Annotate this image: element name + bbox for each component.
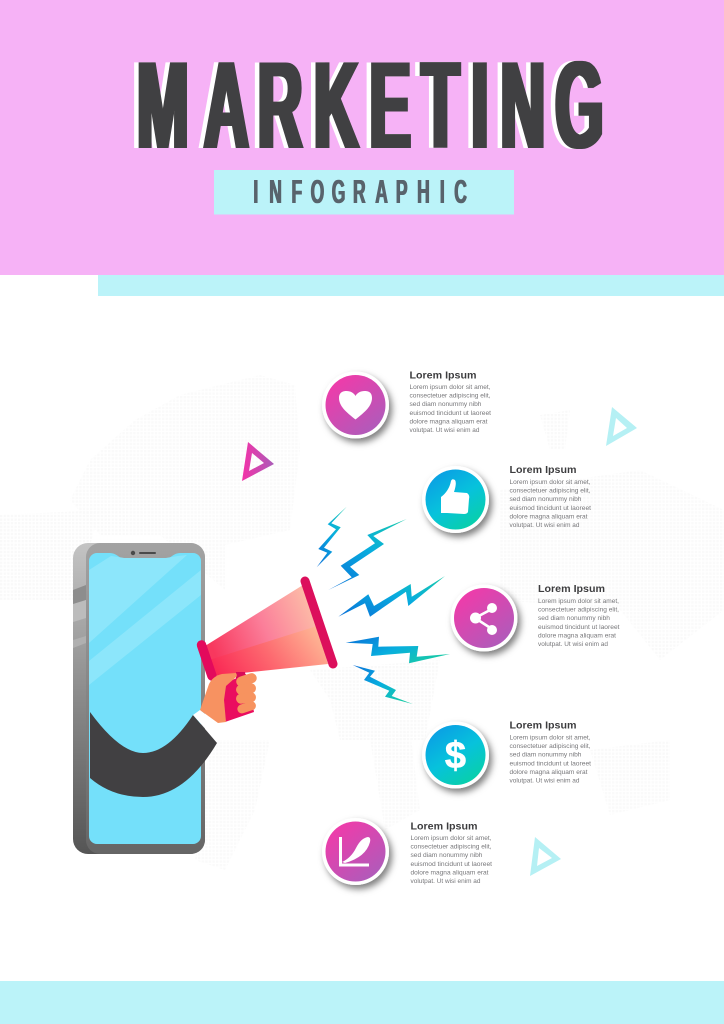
- phone: [73, 543, 205, 854]
- text block 1: [410, 370, 491, 434]
- text block 2: euismod tincidunt ut laoreet: [510, 505, 591, 512]
- text block 5: euismod tincidunt ut laoreet: [410, 861, 492, 868]
- text block 5: Lorem Ipsum: [410, 820, 478, 832]
- lightning bolts: [317, 507, 450, 704]
- text block 5: sed diam nonummy nibh: [410, 852, 483, 859]
- text block 3: Lorem Ipsum: [538, 583, 605, 595]
- text block 5: dolore magna aliquam erat: [410, 869, 489, 876]
- title: MARKETING: [132, 35, 599, 175]
- text block 4: Lorem ipsum dolor sit amet,: [510, 734, 591, 742]
- text block 4: euismod tincidunt ut laoreet: [510, 760, 591, 767]
- text block 4: [510, 720, 591, 784]
- text block 2: Lorem ipsum dolor sit amet,: [510, 479, 591, 486]
- text block 3: sed diam nonummy nibh: [538, 615, 610, 622]
- icon: thumbs up: [422, 466, 489, 533]
- title: MARKETING: [137, 35, 604, 175]
- icon: share: [450, 584, 518, 652]
- text block 1: consectetuer adipiscing elit,: [410, 393, 491, 400]
- footer strip: [0, 981, 724, 1024]
- text block 3: volutpat. Ut wisi enim ad: [538, 641, 608, 648]
- triangle: cyan top: [606, 407, 637, 446]
- text block 1: euismod tincidunt ut laoreet: [410, 410, 491, 417]
- text block 1: sed diam nonummy nibh: [410, 401, 482, 408]
- text block 2: volutpat. Ut wisi enim ad: [510, 522, 580, 529]
- item 1: heart: [322, 370, 491, 438]
- icon: heart: [322, 372, 389, 438]
- item 3: share: [450, 583, 620, 652]
- bolt 4: [346, 637, 450, 663]
- text block 3: [538, 583, 620, 648]
- text block 1: volutpat. Ut wisi enim ad: [410, 427, 480, 434]
- icon: dollar: [422, 722, 489, 788]
- item 5: growth: [322, 818, 492, 885]
- header banner: [0, 0, 724, 275]
- text block 5: consectetuer adipiscing elit,: [410, 844, 492, 851]
- text block 2: consectetuer adipiscing elit,: [510, 488, 591, 495]
- arm and hand: [90, 672, 258, 797]
- triangle: cyan bottom: [530, 837, 561, 876]
- text block 2: [510, 464, 591, 529]
- text block 3: dolore magna aliquam erat: [538, 632, 616, 639]
- text block 1: Lorem ipsum dolor sit amet,: [410, 384, 491, 391]
- text block 5: volutpat. Ut wisi enim ad: [410, 878, 481, 885]
- text block 4: Lorem Ipsum: [510, 720, 576, 732]
- text block 5: Lorem ipsum dolor sit amet,: [410, 835, 492, 842]
- text block 3: consectetuer adipiscing elit,: [538, 607, 619, 614]
- bolt 1: [317, 507, 347, 567]
- text block 2: sed diam nonummy nibh: [510, 496, 582, 503]
- text block 4: dolore magna aliquam erat: [510, 769, 588, 776]
- background world map dots: [0, 375, 724, 870]
- item 2: like: [422, 464, 591, 533]
- icon: growth chart: [322, 818, 389, 885]
- megaphone: [202, 581, 333, 676]
- subtitle box: INFOGRAPHIC: [253, 173, 467, 210]
- text block 4: volutpat. Ut wisi enim ad: [510, 778, 580, 784]
- text block 4: sed diam nonummy nibh: [510, 752, 582, 759]
- text block 2: Lorem Ipsum: [510, 464, 576, 476]
- text block 2: dolore magna aliquam erat: [510, 513, 588, 520]
- bolt 5: [353, 665, 413, 704]
- item 4: money: [422, 720, 591, 788]
- subtitle box: [214, 170, 514, 214]
- text block 4: consectetuer adipiscing elit,: [510, 743, 591, 750]
- text block 5: [410, 820, 492, 885]
- text block 1: dolore magna aliquam erat: [410, 418, 488, 425]
- bolt 3: [338, 576, 445, 617]
- text block 3: Lorem ipsum dolor sit amet,: [538, 598, 619, 605]
- text block 1: Lorem Ipsum: [410, 370, 476, 382]
- cyan strip under banner: [98, 275, 724, 296]
- icon: dollar: $: [445, 735, 466, 777]
- triangle: pink: [242, 442, 274, 481]
- bolt 2: [328, 519, 407, 590]
- text block 3: euismod tincidunt ut laoreet: [538, 624, 620, 631]
